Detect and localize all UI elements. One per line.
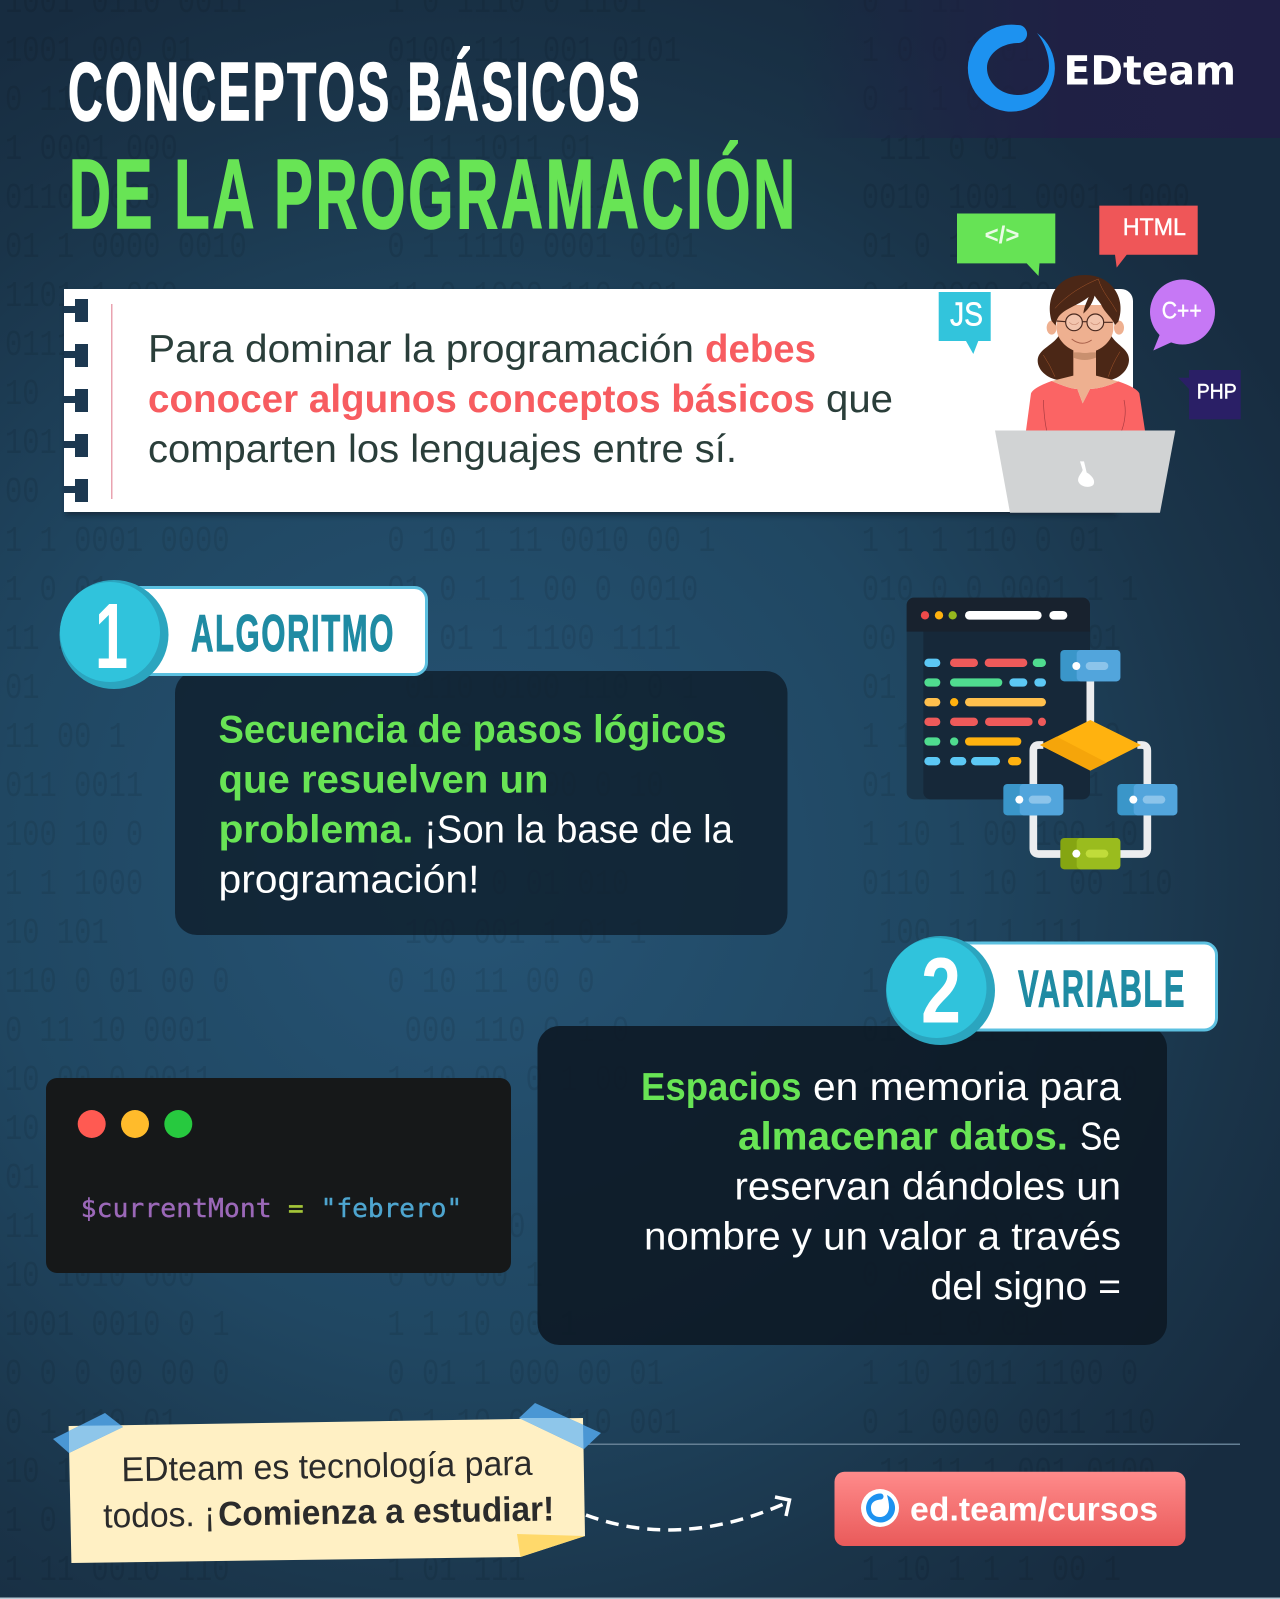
infographic canvas: 0 01 1 1100 1111 [387, 619, 681, 660]
intro text [148, 328, 893, 471]
infographic canvas: 10 [5, 1109, 40, 1150]
infographic canvas: 110 0 01 00 0 [5, 962, 230, 1003]
infographic canvas: 0 1 10 0 0110 001 [387, 1403, 681, 1444]
infographic canvas: 1 01 111 [387, 1550, 526, 1591]
infographic canvas: 1001 000 01 [5, 31, 195, 72]
neck shadow [1073, 352, 1096, 360]
flow connectors [1033, 680, 1147, 854]
infographic canvas: 1 10 1011 1100 0 [862, 1354, 1138, 1395]
infographic canvas: 100 001 1 01 1 [387, 913, 646, 954]
panel: variable text: Espacios [641, 1066, 802, 1109]
infographic canvas: 1 11 0010 110 [5, 1550, 230, 1591]
infographic canvas: 1011 0 01 0110 [387, 178, 629, 219]
panel: algoritmo text: problema. [218, 809, 414, 852]
infographic canvas: 01 1 0 1 0 1 [862, 1501, 1086, 1542]
infographic canvas: 010 0 0 0001 1 1 [862, 570, 1138, 611]
infographic canvas: 11 0 1000 110 001 [387, 276, 681, 317]
infographic canvas: 0 1 1110 0001 0101 [387, 227, 698, 268]
infographic canvas: 1 1 1000 [5, 864, 143, 905]
infographic canvas: 1111 [862, 472, 948, 513]
infographic canvas: 01 [5, 668, 40, 709]
flow box left [1003, 784, 1063, 815]
panel: variable text [538, 1026, 1167, 1345]
panel: algoritmo text: ¡Son la base de la [424, 809, 734, 852]
infographic canvas: 00 11 0 01 010 [387, 864, 629, 905]
infographic canvas: 1 10 0111 [862, 325, 1017, 366]
infographic canvas: 10 1010 000 [5, 1256, 195, 1297]
flow box bottom [1060, 838, 1120, 869]
glasses [1057, 314, 1113, 331]
note text: Comienza a estudiar! [218, 1490, 554, 1534]
infographic canvas: 1001 0010 0 1 [5, 1305, 230, 1346]
infographic canvas: 10 101 [5, 913, 109, 954]
logo: EDteam: EDteam [1064, 48, 1236, 94]
infographic canvas: 10 1 [5, 1452, 74, 1493]
infographic canvas: 1 1 0 0 01 1010 [862, 717, 1121, 758]
code window [907, 598, 1090, 799]
infographic canvas: 10 00 0 0011 [5, 1060, 212, 1101]
smile [1072, 339, 1092, 343]
hair lobes [1038, 332, 1129, 380]
flow box top [1060, 650, 1120, 681]
code line: = [288, 1194, 304, 1224]
hair strands [1043, 279, 1120, 377]
intro text: conocer algunos conceptos básicos [148, 378, 815, 421]
logo: EDteam [968, 25, 1236, 112]
bubble: JS [939, 292, 991, 354]
infographic canvas: 11 1 [5, 619, 74, 660]
infographic canvas: 0010 1001 0001 1000 [862, 178, 1190, 219]
intro text: que [826, 378, 893, 421]
infographic canvas: 1 1 10 00 1 [387, 1305, 577, 1346]
infographic canvas: 11 00 1 [5, 717, 126, 758]
illustration: laptop [995, 430, 1175, 513]
infographic canvas: 00 1 1 0 [387, 1207, 526, 1248]
infographic canvas: 00 [5, 472, 40, 513]
title: CONCEPTOS BÁSICOS [68, 45, 642, 138]
infographic canvas: 1 10 1 00 100 10 [862, 815, 1138, 856]
title: DE LA PROGRAMACIÓN [69, 139, 798, 249]
infographic canvas: 100 11 1 111 [862, 913, 1086, 954]
infographic canvas: 0 0 0 00 00 0 [5, 1354, 230, 1395]
infographic canvas: 0 00 01 0 1 11 [862, 1256, 1104, 1297]
infographic canvas: 01 [5, 1158, 40, 1199]
infographic canvas: 0 00 00 1 [387, 1256, 543, 1297]
illustration: code window and flowchart [907, 598, 1177, 869]
code line: $currentMont [81, 1194, 272, 1224]
infographic canvas: 0 1 1 0 0 10 [862, 1207, 1086, 1248]
bubble: PHP [1178, 370, 1241, 419]
infographic canvas: 1 10 1 1 1 00 1 [862, 1550, 1121, 1591]
infographic canvas: 1 10 00 0 1 00 [387, 1060, 629, 1101]
infographic canvas: 11 [5, 1207, 40, 1248]
infographic canvas: 01 0 1 1 00 0 0010 [387, 570, 698, 611]
bubble: HTML: HTML [1123, 214, 1186, 241]
infographic canvas: 0 10 11 00 0 [387, 962, 595, 1003]
note text [102, 1444, 554, 1536]
note text: todos. ¡ [103, 1496, 216, 1536]
infographic canvas: 01 1 0 01 1 11 [862, 766, 1104, 807]
infographic canvas: 100 10 0 [5, 815, 143, 856]
infographic canvas: 1 0 1010 1100 [5, 1501, 230, 1542]
bubble: HTML [1099, 206, 1198, 268]
panel: algoritmo text [175, 671, 788, 935]
infographic canvas: 01 0 1 0 0 [862, 227, 1035, 268]
infographic canvas: 1 0 1 1 0 0 0 10 [862, 1060, 1138, 1101]
infographic canvas: 10 1 00 [387, 1158, 508, 1199]
sticky note [53, 1403, 601, 1563]
infographic canvas: 0110 0 0011 1 [387, 80, 612, 121]
infographic canvas: 1101 1 000 [5, 276, 178, 317]
infographic canvas: 0 1 110 01 [5, 1403, 178, 1444]
infographic canvas: 0110 0000 [5, 178, 160, 219]
infographic canvas: 1 0 01 [5, 570, 109, 611]
panel: notebook intro [64, 289, 1133, 515]
panel: variable text: almacenar datos. [738, 1116, 1068, 1158]
laptop logo [1078, 461, 1094, 487]
infographic canvas: 0111 0 [5, 325, 109, 366]
infographic canvas: 1 0 0 1 01 1 [862, 1109, 1086, 1150]
infographic canvas: 01 10 11 1 0 0 [862, 1011, 1104, 1052]
infographic canvas: 10 [5, 374, 40, 415]
divider line [585, 1444, 1240, 1445]
flow decision [1040, 720, 1141, 771]
code line [81, 1194, 462, 1224]
infographic canvas: 1010 001 01 [387, 1452, 577, 1493]
infographic canvas: 00 1 0 00 10 01 [862, 619, 1121, 660]
sleeve lines [1043, 400, 1125, 431]
hair top [1050, 275, 1121, 326]
infographic canvas: 1011 [862, 423, 948, 464]
panel: variable text: del signo = [930, 1266, 1121, 1308]
infographic canvas: 0 1 1 0 01 [862, 80, 1035, 121]
infographic canvas: 1 1 [862, 962, 914, 1003]
bubble: code tag: </> [985, 222, 1019, 249]
infographic canvas: 110 0 1 0 1 [387, 717, 577, 758]
tape left [53, 1413, 123, 1453]
infographic canvas: 0 1 0000 00 1 [862, 276, 1086, 317]
panel: variable text: reservan dándoles un [734, 1166, 1121, 1208]
face [1057, 305, 1113, 353]
heading: 2 variable: 2 [921, 939, 961, 1043]
infographic canvas: 111 0 01 [862, 129, 1017, 170]
infographic canvas: 0110 0100 110 0 1 [387, 668, 698, 709]
infographic canvas: 01 1 11 [387, 1501, 508, 1542]
infographic canvas: 101 [5, 423, 57, 464]
infographic canvas: 0 1 0000 0011 110 [862, 1403, 1155, 1444]
code line: "febrero" [321, 1194, 462, 1224]
panel: algoritmo text: que resuelven un [218, 759, 548, 802]
infographic canvas: 0 1 1 0 01 1 [862, 1305, 1069, 1346]
infographic canvas: 1 1 0001 0000 [5, 521, 230, 562]
button: ed.team/cursos [834, 1472, 1186, 1546]
infographic canvas: 0 1 0 [387, 1109, 474, 1150]
infographic canvas: 01 1 0000 0010 [5, 227, 247, 268]
infographic canvas: 10 1 01 [862, 374, 1000, 415]
note text: EDteam es tecnología para [121, 1445, 534, 1489]
infographic canvas: 1 0 0 0 1 0 01 [387, 815, 629, 856]
bubble: code tag [957, 214, 1055, 276]
heading: 1 algoritmo: ALGORITMO [191, 605, 395, 663]
infographic canvas: 0 11 10 0001 [5, 1011, 212, 1052]
panel: variable text: nombre y un valor a través [644, 1216, 1121, 1258]
panel: algoritmo text: Secuencia de pasos lógicos [218, 709, 726, 752]
button logo [861, 1489, 899, 1527]
panel: algoritmo text: programación! [218, 859, 480, 902]
heading: 1 algoritmo: 1 [95, 584, 128, 688]
header corner band [800, 0, 1280, 138]
infographic canvas: 11 11 1 001 0100 [862, 1452, 1155, 1493]
infographic canvas: 011 0011 [5, 766, 143, 807]
panel: variable text: Se [1080, 1116, 1121, 1158]
infographic canvas: 0 10 1 11 0010 00 1 [387, 521, 716, 562]
bubble: PHP: PHP [1197, 380, 1237, 404]
infographic canvas: 1 0 0 1 01 [862, 31, 1035, 72]
infographic canvas: 0 0 01 1100 0 10 [387, 766, 664, 807]
infographic canvas: 1 1 1 110 0 01 [862, 521, 1104, 562]
shirt [1026, 381, 1145, 431]
illustration: programmer [1026, 275, 1145, 431]
neck [1052, 345, 1118, 403]
heading: 2 variable [886, 936, 1216, 1045]
infographic canvas: 0100 111 001 0101 [387, 31, 681, 72]
intro text: debes [705, 328, 816, 371]
ears [1047, 321, 1057, 335]
panel: variable text: en memoria para [813, 1066, 1122, 1109]
flow box right [1117, 784, 1177, 815]
infographic canvas: 1 0001 000 [5, 129, 178, 170]
infographic canvas: 000 110 0 1 0 [387, 1011, 629, 1052]
heading: 1 algoritmo [60, 580, 426, 689]
arrow [586, 1497, 790, 1530]
tape right [519, 1403, 601, 1449]
infographic canvas: 0110 1 10 1 00 110 [862, 864, 1173, 905]
bubble: C++: C++ [1162, 298, 1202, 324]
panel: code window [46, 1078, 511, 1273]
intro text: comparten los lenguajes entre sí. [148, 428, 737, 471]
bubble: JS: JS [950, 296, 983, 332]
bubble: C++ [1150, 280, 1215, 350]
infographic canvas: 1 10 1 1 0 01 [862, 1158, 1104, 1199]
button: ed.team/cursos: ed.team/cursos [910, 1491, 1158, 1528]
infographic canvas: 1 11 1011 01 [387, 129, 595, 170]
intro text: Para dominar la programación [148, 328, 694, 371]
title [68, 45, 798, 249]
infographic canvas: 0 01 1 000 00 01 [387, 1354, 664, 1395]
infographic canvas: 0 11 0 00 10 [5, 80, 212, 121]
infographic canvas: 01 0 00 1001 [862, 668, 1069, 709]
